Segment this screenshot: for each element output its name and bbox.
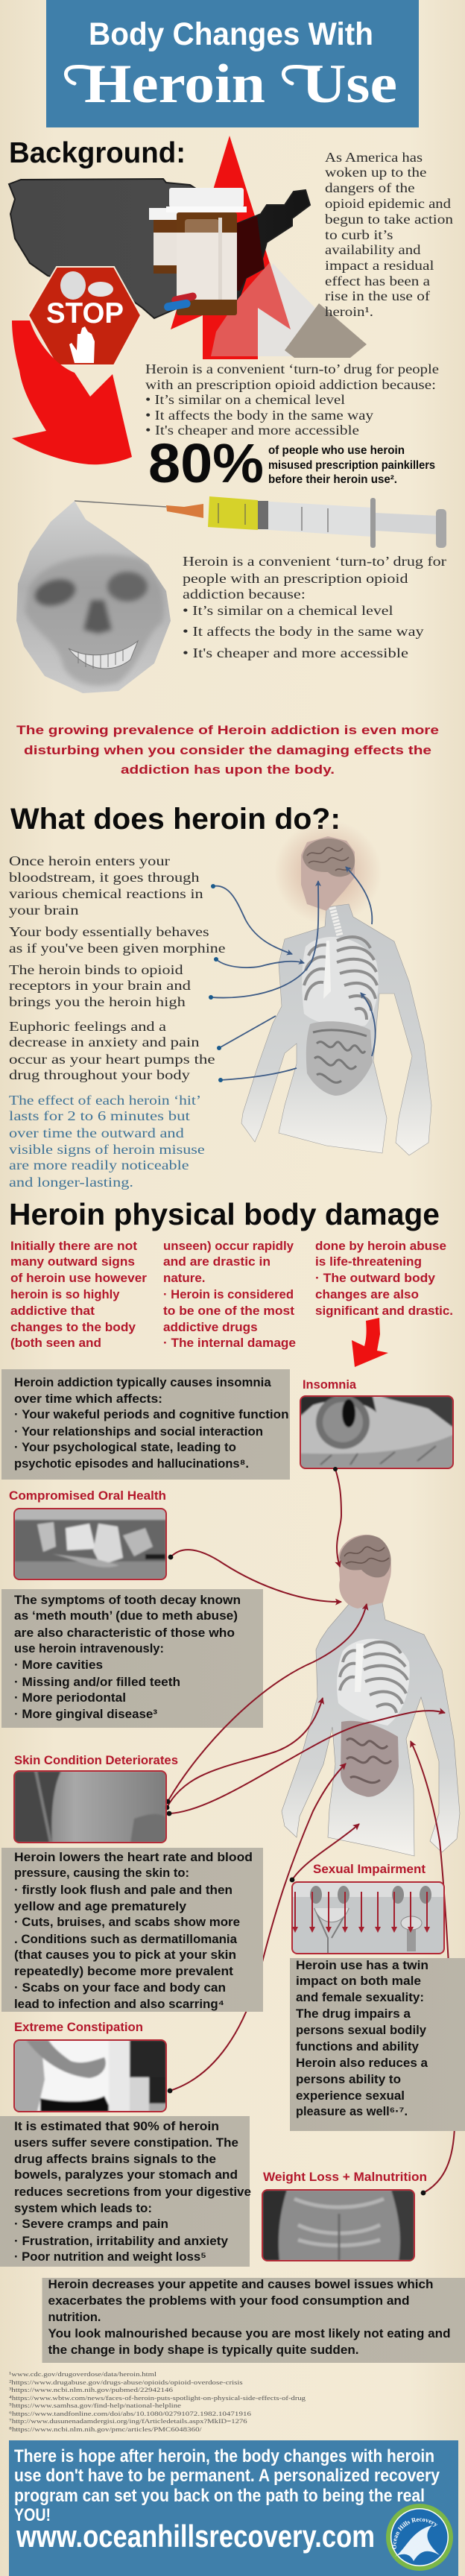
panel: sexual impairment text: persons sexual bodily xyxy=(296,2023,427,2037)
panel: insomnia text: Heroin addiction typically causes insomnia xyxy=(14,1375,271,1389)
label: weight loss and malnutrition: Weight Loss + Malnutrition xyxy=(263,2170,427,2184)
text: red column two: nature. xyxy=(163,1271,206,1285)
panel: oral health text: as ‘meth mouth’ (due to meth abuse) xyxy=(14,1609,238,1623)
icon: capsules xyxy=(163,292,197,312)
icon: stop sign with pills and hand: STOP xyxy=(46,297,124,329)
panel: oral health text: · Missing and/or filled teeth xyxy=(14,1675,180,1689)
panel: insomnia text: over time which affects: xyxy=(14,1392,162,1406)
text: red column one: Initially there are not xyxy=(10,1239,137,1253)
text: red column two: and are drastic in xyxy=(163,1254,271,1269)
text: turn-to drug list xyxy=(145,362,439,438)
text: what heroin does: bloodstream, it goes through xyxy=(9,870,200,885)
text: turn-to drug list: Heroin is a convenient ‘turn-to’ drug for people xyxy=(145,362,439,376)
panel: constipation text: users suffer severe constipation. The xyxy=(14,2135,238,2150)
panel: constipation text: drug affects brains signals to the xyxy=(14,2152,216,2166)
label: skin condition: Skin Condition Deteriorates xyxy=(14,1753,178,1767)
sub-element: brain xyxy=(340,1535,391,1577)
footnotes: ¹www.cdc.gov/drugoverdose/data/heroin.html xyxy=(9,2370,157,2378)
text: turn-to drug list: • It affects the body in the same way xyxy=(145,408,373,423)
icon: stop sign with pills and hand xyxy=(28,267,141,365)
text: convenient drug explanation: • It affects the body in the same way xyxy=(183,624,424,639)
text: blue note on effect duration: visible signs of heroin misuse xyxy=(9,1142,205,1157)
footnotes: ⁴https://www.wbtw.com/news/faces-of-heroin-puts-spotlight-on-physical-side-effects-of-drug xyxy=(9,2394,306,2402)
text: red column three: is life-threatening xyxy=(315,1254,422,1269)
background paragraph: opioid epidemic and xyxy=(325,196,451,211)
background paragraph: rise in the use of xyxy=(325,288,430,303)
panel: insomnia text: psychotic episodes and hallucinations⁸. xyxy=(14,1456,249,1471)
panel: skin text: pressure, causing the skin to: xyxy=(14,1866,189,1880)
figure: body anatomy with brain xyxy=(241,820,431,1155)
text: what heroin does: decrease in anxiety and pain xyxy=(9,1035,200,1049)
logo: Ocean Hills Recovery xyxy=(386,2504,453,2571)
panel: constipation text: bowels, paralyzes your stomach and xyxy=(14,2168,238,2182)
sub-element: rib cage xyxy=(337,1639,410,1726)
panel: constipation text xyxy=(0,2116,251,2267)
statistic: 80 percent xyxy=(148,432,435,494)
panel: sexual impairment text: functions and ability xyxy=(296,2039,420,2053)
panel: malnutrition text: Heroin decreases your appetite and causes bowel issues which xyxy=(48,2277,434,2291)
text: red column three: · The outward body xyxy=(315,1271,436,1285)
sub-element: intestines xyxy=(341,1721,399,1797)
footnotes: ⁵https://www.samhsa.gov/find-help/national-helpline xyxy=(9,2402,181,2409)
title letter swashes xyxy=(66,66,318,83)
text: what heroin does xyxy=(9,853,225,1082)
panel: oral health text xyxy=(1,1589,263,1728)
panel: skin text: lead to infection and also scarring⁴ xyxy=(14,1997,224,2011)
footnotes: ²https://www.drugabuse.gov/drugs-abuse/opioids/opioid-overdose-crisis xyxy=(9,2378,243,2386)
label: sexual impairment: Sexual Impairment xyxy=(313,1862,426,1876)
icon: red up arrow xyxy=(171,136,291,359)
icon: syringe xyxy=(75,496,446,548)
panel: skin text: (that causes you to pick at your skin xyxy=(14,1948,236,1962)
text: blue note on effect duration: are more readily noticeable xyxy=(9,1158,189,1172)
text: what heroin does: brings you the heroin high xyxy=(9,994,186,1009)
panel: sexual impairment text: impact on both male xyxy=(296,1974,421,1988)
text: turn-to drug list: • It's cheaper and more accessible xyxy=(145,423,359,438)
background paragraph: begun to take action xyxy=(325,212,453,227)
text: what heroin does: Your body essentially behaves xyxy=(9,924,209,939)
background paragraph: effect has been a xyxy=(325,274,430,288)
panel: insomnia text: · Your relationships and social interaction xyxy=(14,1424,263,1439)
panel: malnutrition text: You look malnourished because you are most likely not eating and xyxy=(48,2326,450,2340)
text: convenient drug explanation xyxy=(183,554,446,660)
panel: constipation text: It is estimated that 90% of heroin xyxy=(14,2119,219,2133)
panel: skin text: Heroin lowers the heart rate and blood xyxy=(14,1850,253,1864)
label: compromised oral health: Compromised Oral Health xyxy=(9,1489,166,1503)
statistic: 80 percent: misused prescription painkillers xyxy=(268,459,435,472)
statistic: 80 percent: 80% xyxy=(148,432,264,494)
panel: constipation text: · Frustration, irritability and anxiety xyxy=(14,2234,229,2248)
panel: skin text: · Scabs on your face and body can xyxy=(14,1980,226,1995)
footnotes: ³https://www.ncbi.nlm.nih.gov/pubmed/22942146 xyxy=(9,2386,173,2393)
panel: skin text: · Cuts, bruises, and scabs show more xyxy=(14,1915,240,1929)
panel: call to action xyxy=(9,2440,458,2576)
panel: malnutrition text: nutrition. xyxy=(48,2310,101,2324)
label: insomnia: Insomnia xyxy=(303,1377,357,1392)
text: what heroin does: as if you've been given morphine xyxy=(9,941,225,956)
text: convenient drug explanation: people with an prescription opioid xyxy=(183,571,408,586)
photo: stomach pain xyxy=(14,2040,166,2112)
panel: oral health text: use heroin intravenously: xyxy=(14,1641,164,1655)
icon: pill bottles xyxy=(149,188,247,315)
photo: eye xyxy=(300,1395,453,1468)
panel: skin text xyxy=(1,1848,263,2012)
photo: thin torso xyxy=(262,2190,414,2261)
text: red column one xyxy=(10,1239,147,1350)
text: red column one: heroin is so highly xyxy=(10,1287,120,1301)
call to action text: YOU! xyxy=(14,2505,51,2525)
text: red column one: of heroin use however xyxy=(10,1271,147,1285)
text: red column one: addictive that xyxy=(10,1304,95,1318)
label: extreme constipation: Extreme Constipation xyxy=(14,2020,143,2034)
panel: sexual impairment text: Heroin also reduces a xyxy=(296,2056,428,2070)
text: what heroin does: Once heroin enters your xyxy=(9,853,170,868)
red statement: addiction has upon the body. xyxy=(121,763,335,777)
arrows: blue connectors xyxy=(209,867,376,1082)
text: red column one: changes to the body xyxy=(10,1320,136,1334)
text: convenient drug explanation: • It's cheaper and more accessible xyxy=(183,645,408,660)
sub-element: spine xyxy=(332,907,340,935)
text: what heroin does: The heroin binds to opioid xyxy=(9,962,183,977)
text: red column two: unseen) occur rapidly xyxy=(163,1239,294,1253)
title line one: Body Changes With xyxy=(89,16,373,52)
panel: constipation text: reduces secretions from your digestive xyxy=(14,2185,251,2199)
background paragraph: woken up to the xyxy=(325,165,427,180)
icon: skull in teardrop xyxy=(16,501,171,693)
text: what heroin does: drug throughout your body xyxy=(9,1067,190,1082)
text: red column two xyxy=(163,1239,296,1350)
text: blue note on effect duration: lasts for 2 to 6 minutes but xyxy=(9,1108,190,1123)
arrows: red connectors xyxy=(165,1467,455,2195)
text: convenient drug explanation: • It’s similar on a chemical level xyxy=(183,603,393,618)
title line two: Heroin xyxy=(84,54,265,115)
panel: insomnia text: · Your wakeful periods and cognitive function xyxy=(14,1407,289,1421)
website address: www.oceanhillsrecovery.com xyxy=(16,2519,375,2554)
title banner xyxy=(46,0,419,127)
arrow: large curved red arrow xyxy=(12,321,132,464)
background paragraph: As America has xyxy=(325,150,423,165)
icon: powder piles xyxy=(211,262,367,358)
sub-element: rib cage xyxy=(302,937,379,1026)
footnotes: ⁷http://www.dusunenadamdergisi.org/ing/fArticledetails.aspx?MkID=1276 xyxy=(9,2417,247,2425)
panel: oral health text: · More gingival disease³ xyxy=(14,1707,157,1721)
panel: oral health text: are also characteristic of those who xyxy=(14,1626,235,1640)
panel: constipation text: system which leads to: xyxy=(14,2201,152,2215)
icon: map of America xyxy=(9,179,310,321)
footnotes: ⁸https://www.ncbi.nlm.nih.gov/pmc/articles/PMC6048360/ xyxy=(9,2425,202,2433)
panel: sexual impairment text: experience sexual xyxy=(296,2089,405,2103)
logo: Ocean Hills Recovery: Ocean Hills Recovery xyxy=(392,2518,438,2549)
background paragraph xyxy=(325,150,453,319)
background paragraph: dangers of the xyxy=(325,180,415,195)
text: what heroin does: various chemical reactions in xyxy=(9,886,203,901)
text: blue note on effect duration: over time the outward and xyxy=(9,1126,184,1140)
arrow: small red arrow xyxy=(352,1318,388,1367)
panel: insomnia text: · Your psychological state, leading to xyxy=(14,1440,236,1454)
text: red column two: · The internal damage xyxy=(163,1336,296,1350)
text: red column three: done by heroin abuse xyxy=(315,1239,446,1253)
footnotes xyxy=(9,2370,306,2433)
text: red column one: many outward signs xyxy=(10,1254,135,1269)
title line two: Use xyxy=(302,54,397,115)
text: blue note on effect duration xyxy=(9,1093,205,1190)
text: red column two: addictive drugs xyxy=(163,1320,258,1334)
statistic: 80 percent: before their heroin use². xyxy=(268,473,397,486)
panel: skin text: . Conditions such as dermatillomania xyxy=(14,1932,238,1946)
panel: sexual impairment text: and female sexuality: xyxy=(296,1990,424,2004)
text: what heroin does: Euphoric feelings and a xyxy=(9,1019,166,1034)
panel: constipation text: · Poor nutrition and weight loss⁵ xyxy=(14,2250,206,2264)
panel: skin text: · firstly look flush and pale and then xyxy=(14,1883,232,1897)
text: convenient drug explanation: addiction because: xyxy=(183,587,306,602)
text: what heroin does: occur as your heart pumps the xyxy=(9,1052,215,1067)
figure: body anatomy with connector targets xyxy=(282,1535,460,1856)
panel: oral health text: The symptoms of tooth decay known xyxy=(14,1593,241,1607)
text: red column three: significant and drastic. xyxy=(315,1304,453,1318)
panel: sexual impairment text: The drug impairs a xyxy=(296,2007,411,2021)
text: red column one: (both seen and xyxy=(10,1336,101,1350)
background paragraph: heroin¹. xyxy=(325,304,373,319)
panel: skin text: repeatedly) become more prevalent xyxy=(14,1964,233,1978)
panel: sexual impairment text: persons ability to xyxy=(296,2072,401,2086)
red statement: The growing prevalence of Heroin addiction is even more xyxy=(16,723,439,737)
panel: sexual impairment text xyxy=(290,1958,465,2131)
background paragraph: impact a residual xyxy=(325,258,434,273)
title line two xyxy=(84,54,397,115)
text: what heroin does: receptors in your brain and xyxy=(9,978,191,993)
text: red column two: to be one of the most xyxy=(163,1304,294,1318)
red statement: disturbing when you consider the damaging effects the xyxy=(24,743,431,757)
photo: reproductive anatomy with arrows xyxy=(292,1882,444,1954)
background paragraph: to curb it’s xyxy=(325,227,393,242)
text: red column three xyxy=(315,1239,453,1318)
text: red column three: changes are also xyxy=(315,1287,419,1301)
text: blue note on effect duration: The effect of each heroin ‘hit’ xyxy=(9,1093,201,1108)
text: convenient drug explanation: Heroin is a convenient ‘turn-to’ drug for xyxy=(183,554,446,569)
call to action text xyxy=(14,2446,440,2525)
panel: malnutrition text: the change in body shape is typically quite sudden. xyxy=(48,2343,358,2357)
red statement xyxy=(16,723,439,777)
panel: oral health text: · More cavities xyxy=(14,1658,103,1672)
photo: damaged teeth xyxy=(14,1509,166,1579)
panel: sexual impairment text: pleasure as well⁶·⁷. xyxy=(296,2104,408,2118)
panel: malnutrition text: exacerbates the problems with your food consumption and xyxy=(48,2294,410,2308)
panel: insomnia text xyxy=(1,1369,290,1480)
sub-element: intestines xyxy=(306,1021,373,1096)
text: blue note on effect duration: and longer-lasting. xyxy=(9,1175,133,1190)
heading: what does heroin do: What does heroin do?: xyxy=(10,803,341,836)
panel: oral health text: · More periodontal xyxy=(14,1690,126,1705)
text: red column two: · Heroin is considered xyxy=(163,1287,294,1301)
panel: sexual impairment text: Heroin use has a twin xyxy=(296,1958,428,1972)
heading: background: Background: xyxy=(9,137,186,169)
heading: physical body damage: Heroin physical body damage xyxy=(9,1197,440,1231)
text: turn-to drug list: • It’s similar on a chemical level xyxy=(145,392,345,407)
photo: skin xyxy=(14,1771,166,1843)
panel: skin text: yellow and age prematurely xyxy=(14,1899,187,1913)
background paragraph: availability and xyxy=(325,242,420,257)
panel: malnutrition text xyxy=(42,2277,465,2363)
footnotes: ⁶https://www.tandfonline.com/doi/abs/10.1080/02791072.1982.10471916 xyxy=(9,2410,251,2417)
text: turn-to drug list: with an prescription opioid addiction because: xyxy=(145,377,436,392)
statistic: 80 percent: of people who use heroin xyxy=(268,444,405,457)
text: what heroin does: your brain xyxy=(9,903,79,918)
sub-element: brain xyxy=(303,839,355,877)
panel: constipation text: · Severe cramps and pain xyxy=(14,2217,168,2231)
